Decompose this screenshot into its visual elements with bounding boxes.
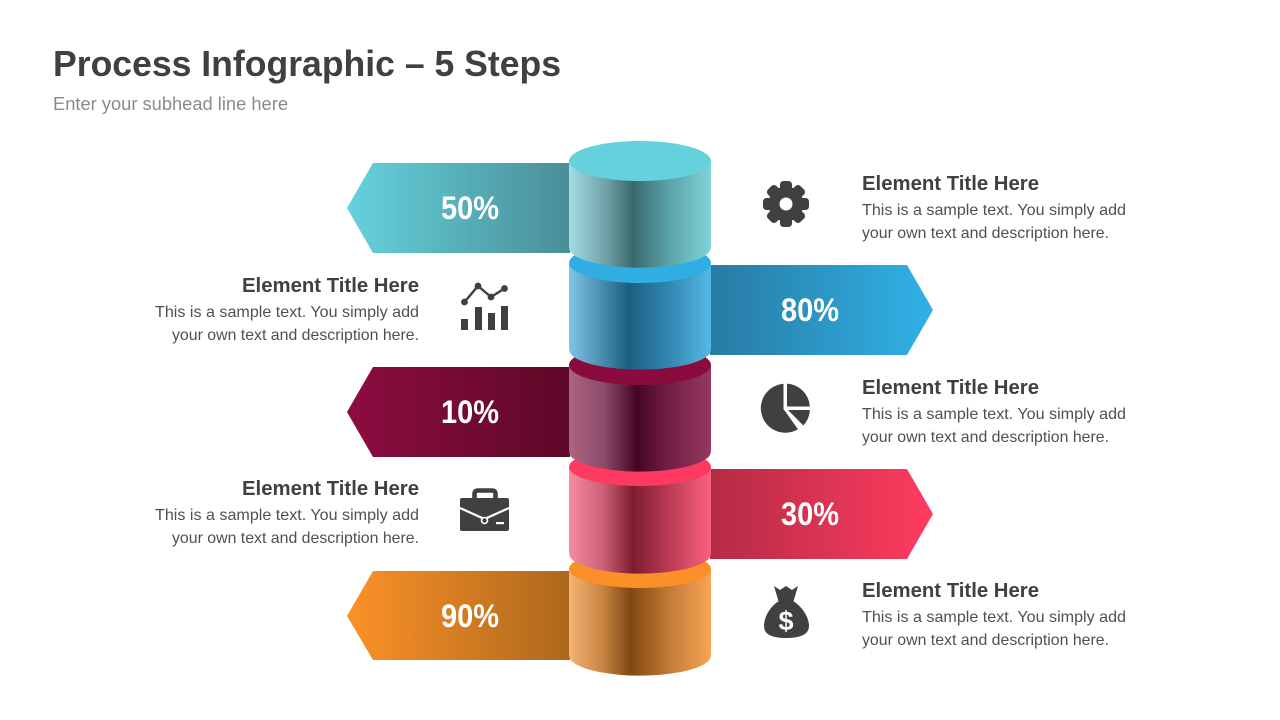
text block: step 5: This is a sample text. You simply add bbox=[862, 609, 1126, 626]
text block: step 2: your own text and description here. bbox=[172, 327, 419, 344]
text block: step 2 bbox=[155, 275, 419, 344]
text block: step 1: This is a sample text. You simply add bbox=[862, 202, 1126, 219]
arrow: 80% bbox=[710, 265, 933, 355]
text block: step 4 bbox=[155, 478, 419, 547]
icon: money bag: $ bbox=[778, 606, 794, 636]
text block: step 4: This is a sample text. You simply add bbox=[155, 507, 419, 524]
text block: step 4: Element Title Here bbox=[242, 478, 419, 500]
cylinder segment: orange bbox=[569, 550, 711, 676]
text block: step 5 bbox=[862, 580, 1126, 649]
icon: pie chart bbox=[761, 384, 810, 433]
text block: step 1 bbox=[862, 173, 1126, 242]
icon: money bag bbox=[764, 586, 809, 638]
text block: step 5: Element Title Here bbox=[862, 580, 1039, 602]
arrow: 30% bbox=[710, 469, 933, 559]
text block: step 3: Element Title Here bbox=[862, 377, 1039, 399]
icon: chart bbox=[461, 283, 508, 330]
percent: 90%: 90% bbox=[441, 598, 499, 634]
icon: gear bbox=[763, 181, 809, 227]
percent: 30%: 30% bbox=[781, 496, 839, 532]
cylinder segment: maroon bbox=[569, 345, 711, 472]
percent: 80%: 80% bbox=[781, 292, 839, 328]
cylinder segment: pink bbox=[569, 448, 711, 574]
arrow: 50% bbox=[347, 163, 570, 253]
arrow: 10% bbox=[347, 367, 570, 457]
icon: briefcase bbox=[460, 490, 509, 531]
text block: step 2: Element Title Here bbox=[242, 275, 419, 297]
text block: step 4: your own text and description here. bbox=[172, 530, 419, 547]
cylinder segment: teal bbox=[569, 141, 711, 268]
text block: step 5: your own text and description here. bbox=[862, 632, 1109, 649]
percent: 10%: 10% bbox=[441, 394, 499, 430]
percent: 50%: 50% bbox=[441, 190, 499, 226]
text block: step 3 bbox=[862, 377, 1126, 446]
subhead: Enter your subhead line here bbox=[53, 94, 288, 114]
text block: step 1: your own text and description here. bbox=[862, 225, 1109, 242]
text block: step 3: This is a sample text. You simply add bbox=[862, 406, 1126, 423]
text block: step 2: This is a sample text. You simply add bbox=[155, 304, 419, 321]
text block: step 1: Element Title Here bbox=[862, 173, 1039, 195]
cylinder segment: blue bbox=[569, 243, 711, 370]
arrow: 90% bbox=[347, 571, 570, 660]
title: Process Infographic – 5 Steps bbox=[53, 43, 561, 84]
text block: step 3: your own text and description here. bbox=[862, 429, 1109, 446]
